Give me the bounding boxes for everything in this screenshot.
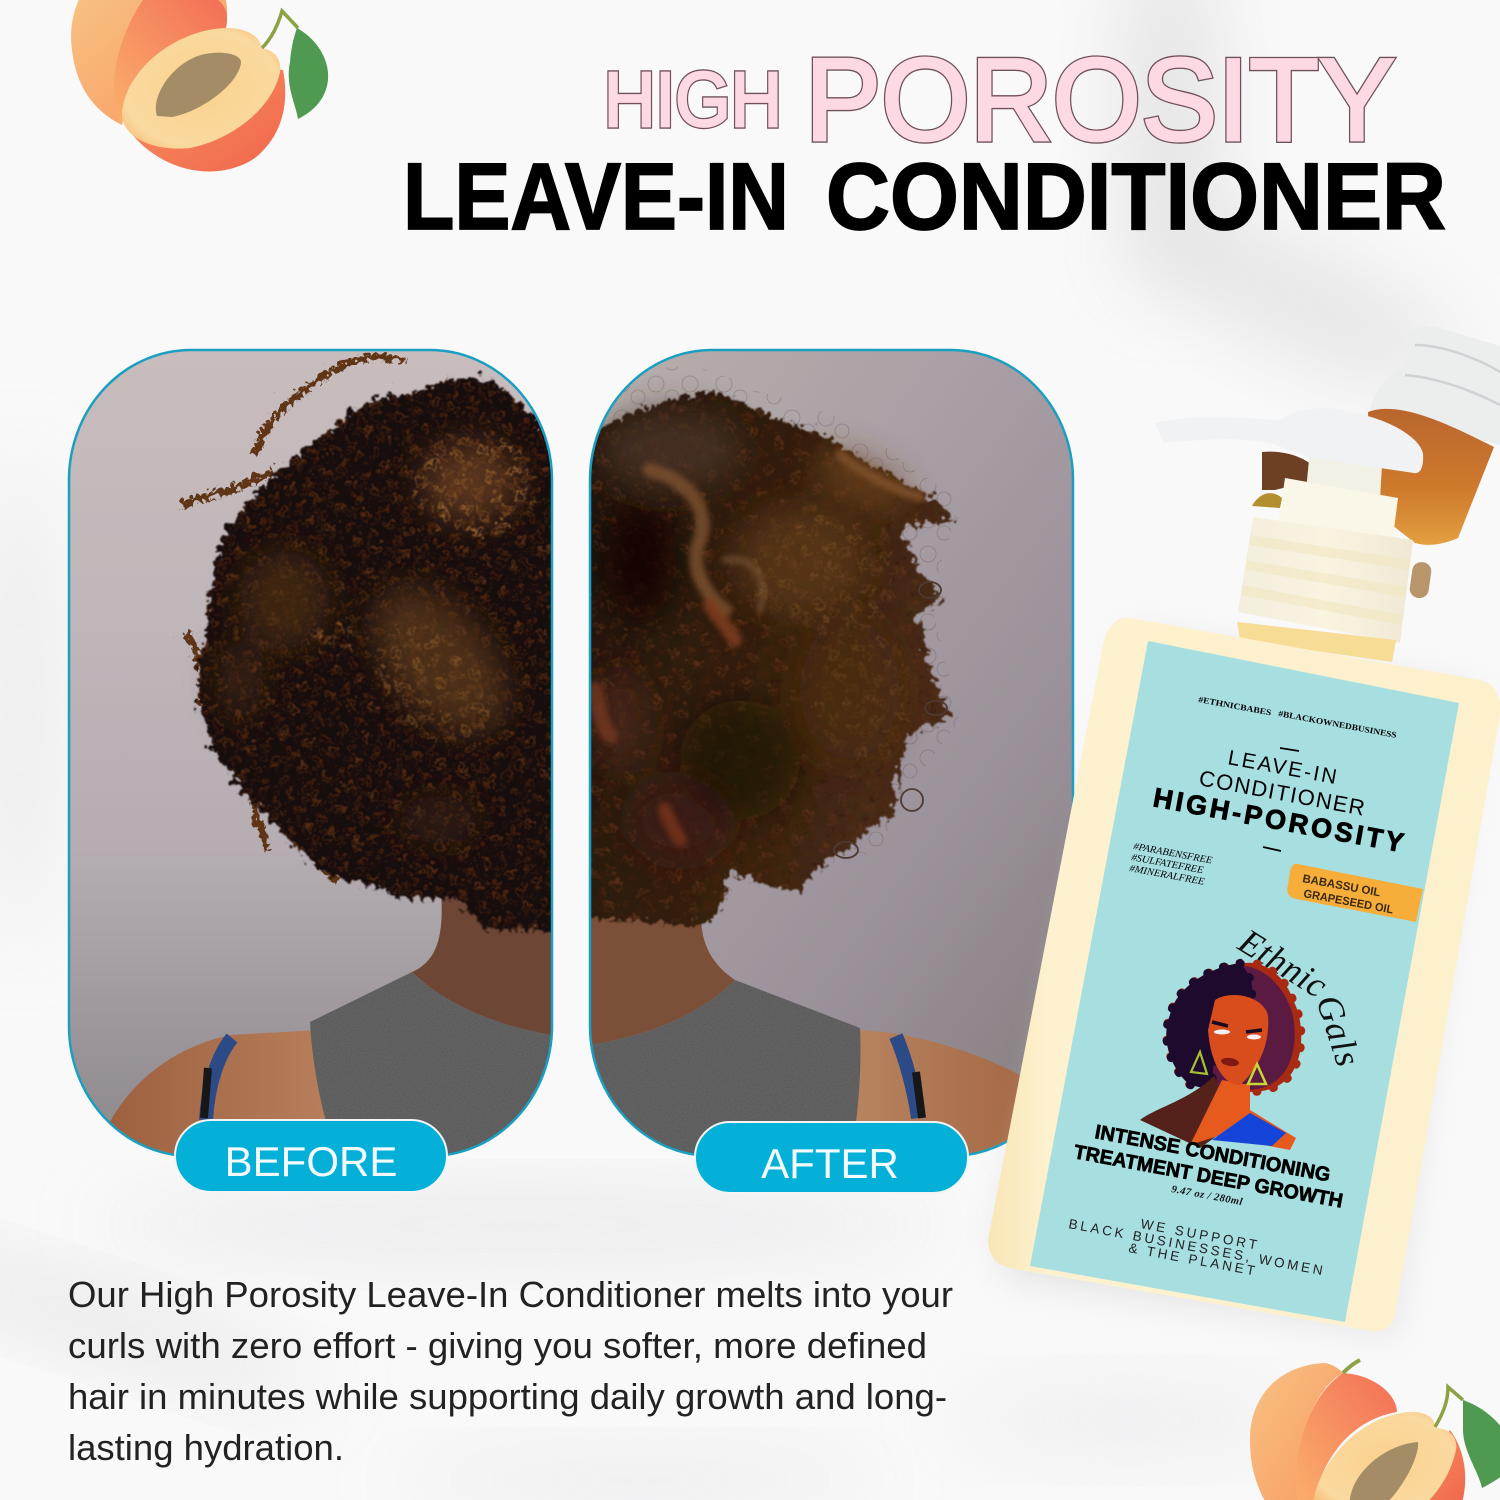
hashtags top: #BLACKOWNEDBUSINESS bbox=[1278, 708, 1398, 740]
title line: LEAVE-IN CONDITIONER: CONDITIONER bbox=[826, 144, 1446, 250]
free-from hashtags bbox=[1128, 841, 1213, 888]
jar highlights bbox=[1405, 345, 1500, 405]
label bbox=[1030, 641, 1459, 1322]
leaf bbox=[1463, 1400, 1500, 1488]
label pill: after bbox=[695, 1122, 968, 1193]
label pill: before bbox=[175, 1120, 447, 1192]
ingredient tag bbox=[1287, 864, 1423, 922]
hair mass bbox=[582, 388, 950, 922]
leaf bbox=[289, 28, 328, 119]
product bottle bbox=[988, 408, 1500, 1335]
neck skin bbox=[591, 915, 735, 1044]
edge ringlets bbox=[834, 582, 947, 858]
stem bbox=[262, 11, 298, 48]
peach flesh bbox=[122, 28, 280, 149]
illustration: woman with afro bbox=[1140, 963, 1301, 1150]
bra strap bbox=[204, 1038, 232, 1120]
copper curl strands bbox=[595, 455, 920, 840]
blue top bbox=[1212, 1113, 1286, 1146]
icon: honey jar bbox=[1368, 327, 1500, 599]
face bbox=[1208, 995, 1268, 1085]
title line: HIGH POROSITY: POROSITY bbox=[805, 34, 1395, 165]
hair mass bbox=[192, 372, 570, 925]
free-from hashtags: #PARABENSFREE bbox=[1132, 841, 1213, 867]
gold curl clusters bbox=[750, 512, 908, 760]
wall backdrop bbox=[69, 350, 552, 1156]
label heading: LEAVE-IN bbox=[1226, 746, 1338, 789]
label heading bbox=[1151, 746, 1406, 858]
wall backdrop bbox=[593, 351, 1072, 1076]
icon: peach bottom right bbox=[1250, 1360, 1500, 1500]
stem bbox=[1343, 1360, 1360, 1373]
back peach bbox=[1250, 1363, 1343, 1500]
icon: peach top left bbox=[71, 0, 328, 171]
stone bbox=[1350, 1442, 1418, 1500]
back peach bbox=[71, 0, 227, 125]
panel: before photo bbox=[69, 350, 570, 1160]
peach skin bbox=[1400, 1430, 1465, 1500]
title line: HIGH POROSITY: POROSITY bbox=[805, 34, 1395, 165]
stone bbox=[156, 53, 241, 117]
peach skin bbox=[126, 60, 285, 171]
grey top bbox=[310, 972, 552, 1160]
gold curl clusters bbox=[300, 430, 532, 763]
description text bbox=[68, 1274, 953, 1468]
hair halo bbox=[590, 367, 960, 900]
panel outline bbox=[69, 350, 552, 1156]
label pill: after: AFTER bbox=[761, 1140, 899, 1187]
peach flesh bbox=[1312, 1412, 1456, 1500]
jar glass bbox=[1370, 327, 1500, 445]
label pill: before: BEFORE bbox=[225, 1138, 397, 1185]
description text: curls with zero effort - giving you softer, more defined bbox=[68, 1325, 927, 1366]
title line: HIGH POROSITY: HIGH bbox=[604, 57, 782, 143]
loose curls bbox=[176, 352, 400, 875]
hashtags top bbox=[1198, 694, 1398, 740]
slogan: & THE PLANET bbox=[1127, 1240, 1256, 1278]
pump ribbed collar bbox=[1238, 517, 1413, 643]
label heading: HIGH-POROSITY bbox=[1151, 782, 1406, 858]
title line: LEAVE-IN CONDITIONER bbox=[403, 144, 1446, 250]
shoulder bbox=[856, 1030, 1020, 1154]
panel outline bbox=[590, 350, 1073, 1156]
pump nozzle bbox=[1155, 408, 1423, 473]
brand script bbox=[1231, 920, 1369, 1071]
hair highlights bbox=[594, 410, 914, 860]
description text: lasting hydration. bbox=[68, 1427, 344, 1468]
ingredient tag: GRAPESEED OIL bbox=[1302, 888, 1394, 917]
ingredient tag: BABASSU OIL bbox=[1301, 873, 1381, 899]
hashtags top: #ETHNICBABES bbox=[1198, 694, 1273, 718]
stem bbox=[1435, 1387, 1463, 1427]
bra strap bbox=[896, 1036, 922, 1118]
pump upper collar bbox=[1278, 478, 1398, 545]
afro purple bbox=[1166, 966, 1295, 1090]
brand script: Gals bbox=[1308, 990, 1369, 1071]
brand script: Ethnic bbox=[1231, 920, 1334, 1006]
treatment heading: INTENSE CONDITIONING bbox=[1093, 1121, 1332, 1186]
bottle shadow bbox=[995, 630, 1480, 1335]
honey dipper bbox=[1252, 452, 1312, 508]
earrings bbox=[1191, 1052, 1207, 1074]
label heading: CONDITIONER bbox=[1197, 765, 1367, 821]
shoulder bbox=[110, 1030, 326, 1154]
title bbox=[403, 34, 1446, 250]
pump stem bbox=[1306, 450, 1382, 500]
slogan: WE SUPPORT bbox=[1139, 1216, 1258, 1252]
neck skin bbox=[412, 895, 551, 1035]
title line: LEAVE-IN CONDITIONER: LEAVE-IN bbox=[403, 144, 789, 250]
treatment heading: TREATMENT DEEP GROWTH bbox=[1072, 1141, 1345, 1213]
free-from hashtags: #SULFATEFREE bbox=[1130, 852, 1204, 876]
description text: hair in minutes while supporting daily growth and long- bbox=[68, 1376, 947, 1417]
bottle body bbox=[988, 618, 1500, 1331]
honey bbox=[1368, 409, 1494, 545]
free-from hashtags: #MINERALFREE bbox=[1128, 863, 1205, 888]
afro dark bbox=[1166, 963, 1252, 1090]
grey top bbox=[590, 980, 861, 1160]
volume: 9.47 oz / 280ml bbox=[1170, 1184, 1243, 1208]
title line: HIGH POROSITY: HIGH bbox=[604, 57, 782, 143]
description text: Our High Porosity Leave-In Conditioner melts into your bbox=[68, 1274, 953, 1315]
dipper handle bbox=[1409, 561, 1432, 599]
neck and shoulders bbox=[1140, 1075, 1232, 1148]
panel: after photo bbox=[582, 350, 1075, 1160]
bottle neck bbox=[1237, 622, 1396, 662]
hair highlights bbox=[218, 442, 533, 844]
slogan: BLACK BUSINESSES, WOMEN bbox=[1067, 1216, 1324, 1278]
afro outer red bbox=[1166, 963, 1301, 1092]
